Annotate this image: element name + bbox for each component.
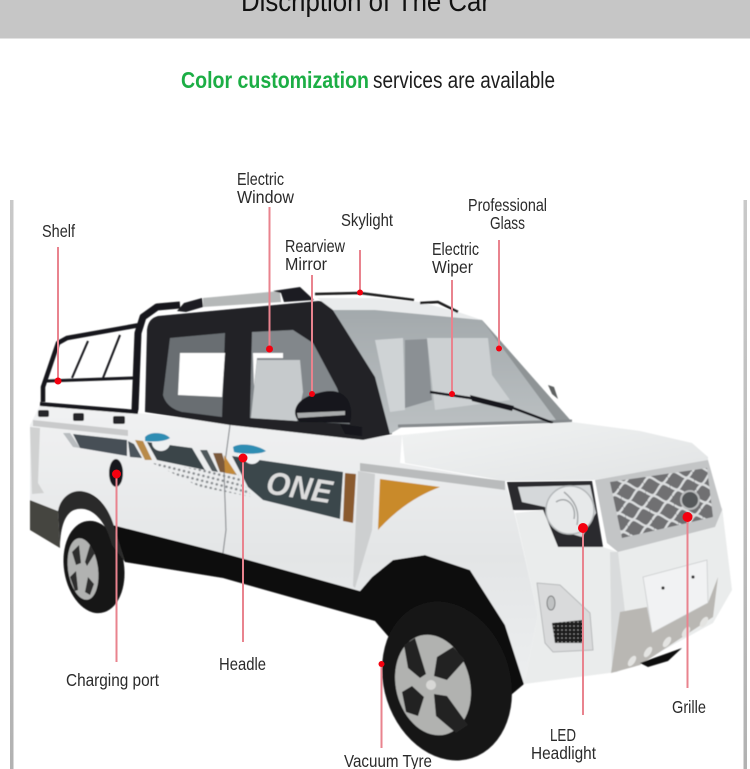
illustration: electric pickup car [30,287,732,769]
callout: electric wiper: Wiper [432,257,473,277]
licence plate recess [643,560,708,633]
callout: charging port [66,470,159,690]
ONE decal [232,456,356,523]
fog lamp [537,583,593,652]
side frame rails [10,200,747,769]
callout: shelf [42,221,75,384]
front wheel arch and sill [113,525,524,700]
rear light [30,427,44,494]
side decal graphics [63,433,252,497]
callout: professional glass: Glass [490,213,525,233]
callout: LED headlight [531,523,596,763]
callout: electric wiper [432,239,479,397]
callout: electric wiper: Electric [432,239,479,259]
rear arch [58,491,125,562]
callout: professional glass: Professional [468,195,547,215]
callout: grille: Grille [672,697,706,717]
header band [0,0,750,38]
hood [402,422,708,481]
wiper [430,392,553,423]
front fascia [515,507,732,684]
callout: electric window: Window [237,187,294,207]
callout: LED headlight: Headlight [531,743,596,763]
callout: handle: Headle [219,654,266,674]
wiper blade [470,395,514,411]
rear tyre [57,516,131,618]
callout: skylight: Skylight [341,210,393,230]
callout: rearview mirror [285,236,345,397]
front fender gap shade [353,471,375,588]
rear lower band [30,500,60,548]
charging port [109,459,123,487]
belt trim [33,420,128,436]
callout: rearview mirror: Mirror [285,254,327,274]
callout: electric window [237,169,294,352]
callout: shelf: Shelf [42,221,75,241]
door seams [223,425,230,553]
side mirror [295,391,362,436]
callout: grille [672,512,706,717]
ONE decal: ONE [264,464,336,510]
callout: LED headlight: LED [550,725,576,745]
callout: electric window: Electric [237,169,284,189]
callout: handle [219,454,266,674]
cab pillars and roof [145,301,392,440]
callout: charging port: Charging port [66,670,159,690]
orange side marker [378,479,440,530]
cargo shelf rack [40,305,180,412]
fascia corner shade [610,552,625,672]
roof rack [177,287,314,312]
door handles [145,433,266,464]
rear side window [163,333,225,417]
callout: professional glass [468,195,547,352]
front tyre [362,584,532,769]
front underside [640,648,682,667]
side body [30,405,538,684]
lower bumper guard [611,577,718,673]
fender trim [360,463,505,490]
hub spokes [402,638,468,733]
subtitle: services are available [373,67,555,93]
subtitle: Color customization [181,67,369,93]
grille [595,460,722,552]
callout: rearview mirror: Rearview [285,236,345,256]
windshield [333,310,572,434]
skylight edge [315,293,458,312]
headlight assembly [507,481,603,547]
small right mirror [548,385,558,399]
roof white strip [317,298,482,320]
callout: skylight [341,210,393,296]
cargo knobs [38,410,125,424]
front side window [250,330,350,424]
callout: vacuum tyre [344,661,432,769]
